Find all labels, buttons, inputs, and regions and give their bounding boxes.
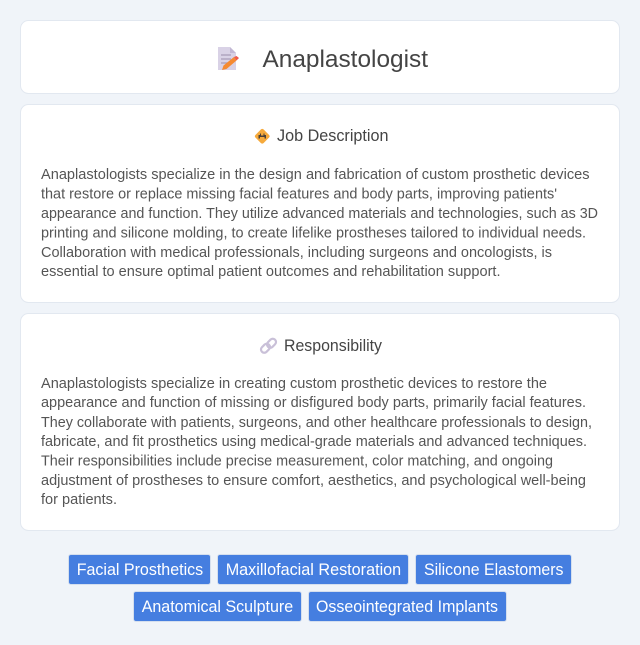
tag: Facial Prosthetics: Facial Prosthetics: [77, 561, 203, 579]
tag: Osseointegrated Implants: [308, 592, 506, 622]
responsibility body text: appearance and function of missing or disfigured body parts, primarily facial features.: [41, 395, 586, 411]
icon: chain link: [260, 337, 277, 354]
icon: orange diamond sign: [254, 128, 270, 144]
job description body text: Collaboration with medical professionals, including surgeons and oncologists, is: [41, 245, 552, 261]
panel: title: [20, 20, 620, 94]
tag: Maxillofacial Restoration: [218, 554, 408, 584]
job description body text: [41, 167, 598, 280]
job description body text: essential to ensure optimal patient outcomes and rehabilitation support.: [41, 264, 500, 280]
title text: Anaplastologist: [262, 46, 428, 73]
responsibility body text: Their responsibilities include precise measurement, color matching, and ongoing: [41, 454, 553, 470]
job description body text: that restore or replace missing facial features and body parts, improving patients': [41, 186, 557, 202]
responsibility heading: Responsibility: [284, 337, 383, 355]
responsibility body text: They collaborate with patients, surgeons, and other healthcare professionals to design,: [41, 415, 592, 431]
job description body text: Anaplastologists specialize in the design and fabrication of custom prosthetic devices: [41, 167, 590, 183]
tag: Anatomical Sculpture: Anatomical Sculpture: [142, 598, 293, 616]
responsibility body text: fabricate, and fit prosthetics using medical-grade materials and advanced techniques.: [41, 434, 587, 450]
tag: Maxillofacial Restoration: Maxillofacial Restoration: [226, 561, 401, 579]
panel: responsibility: [20, 314, 620, 530]
tag: Silicone Elastomers: Silicone Elastomers: [424, 561, 564, 579]
tag: Facial Prosthetics: [68, 554, 210, 584]
responsibility body text: [41, 376, 592, 508]
responsibility body text: for patients.: [41, 492, 117, 508]
job description body text: appearance and function. They utilize advanced materials and technologies, such as 3D: [41, 206, 598, 222]
job description heading: Job Description: [277, 127, 388, 145]
panel: job description: [20, 104, 620, 302]
icon: memo with pencil: [218, 47, 239, 70]
responsibility body text: Anaplastologists specialize in creating custom prosthetic devices to restore the: [41, 376, 547, 392]
tag: Anatomical Sculpture: [134, 592, 302, 622]
tag: Osseointegrated Implants: Osseointegrated Implants: [316, 598, 498, 616]
tag group: [68, 554, 572, 622]
tag: Silicone Elastomers: [416, 554, 572, 584]
job description body text: printing and silicone molding, to create lifelike prostheses tailored to individual needs.: [41, 226, 586, 242]
responsibility body text: adjustment of prostheses to ensure comfort, aesthetics, and psychological well-being: [41, 473, 586, 489]
